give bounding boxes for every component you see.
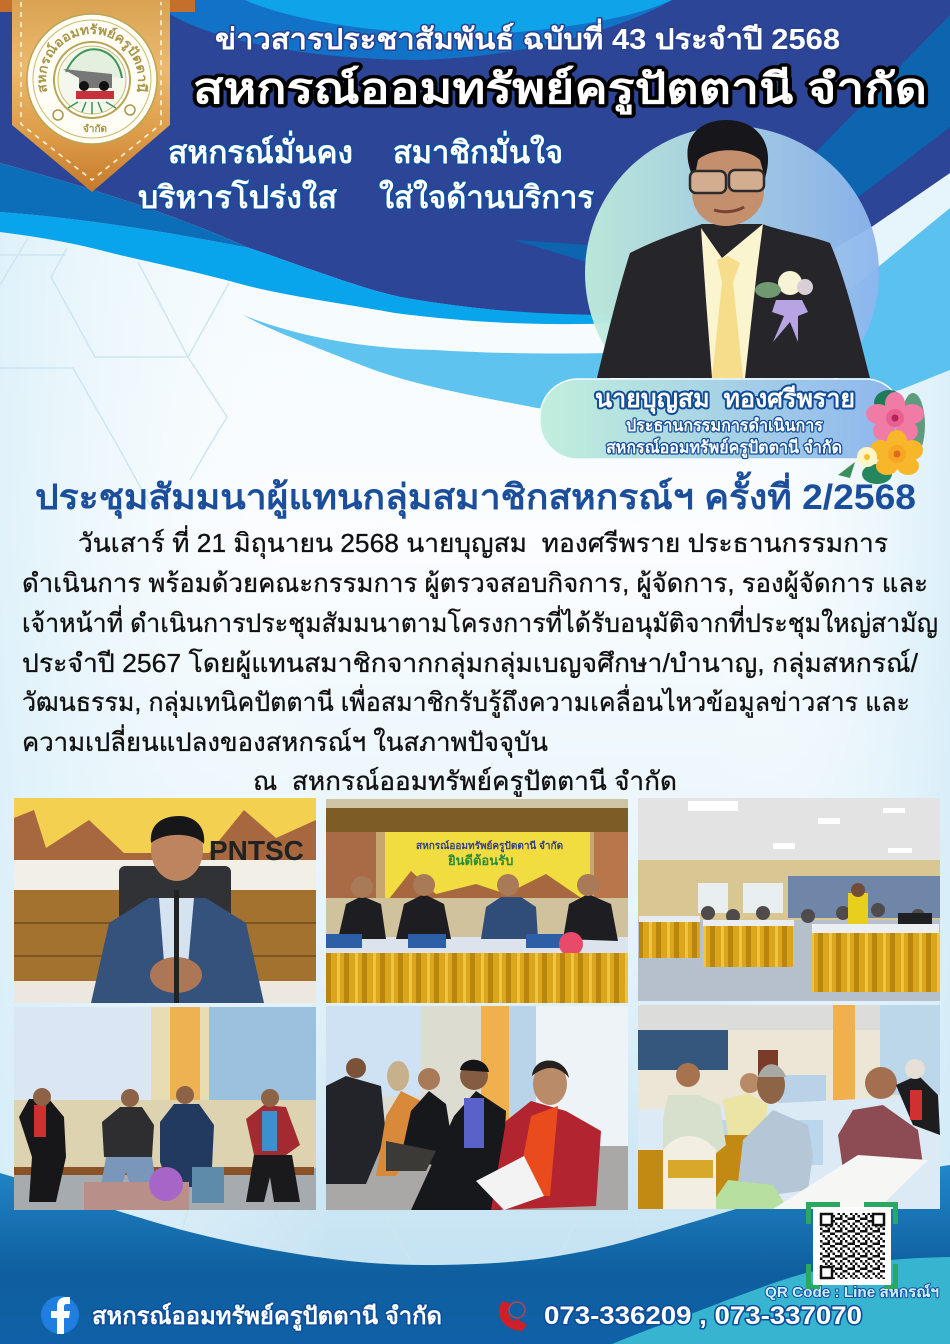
name plate — [540, 379, 903, 459]
photo: four men on sofas — [14, 1007, 316, 1210]
photo: chairman at microphone — [14, 798, 316, 1003]
photo: members at tables — [638, 1005, 940, 1209]
photo: panel at head table — [326, 799, 628, 1003]
name plate: ประธานกรรมการดำเนินการ — [626, 416, 824, 435]
icon: facebook — [41, 1296, 79, 1334]
slogans: ใส่ใจด้านบริการ — [379, 179, 594, 215]
footer waves — [0, 1165, 950, 1344]
portrait of chairman — [585, 120, 879, 420]
photo: seated guests in a row — [326, 1006, 628, 1210]
slogans: สหกรณ์มั่นคง — [168, 130, 353, 170]
slogans: บริหารโปร่งใส — [138, 179, 337, 215]
article body — [22, 525, 938, 797]
QR code with caption — [765, 1204, 939, 1301]
photo: chairman at microphone: PNTSC — [209, 835, 304, 866]
photo: panel at head table: ยินดีต้อนรับ — [448, 853, 513, 868]
logo ribbon — [0, 0, 195, 192]
logo seal: จำกัด — [83, 123, 107, 135]
photo: panel at head table: สหกรณ์ออมทรัพย์ครูปัตตานี จำกัด — [416, 840, 563, 853]
QR code with caption: QR Code : Line สหกรณ์ฯ — [765, 1283, 939, 1301]
facebook page name: สหกรณ์ออมทรัพย์ครูปัตตานี จำกัด — [92, 1302, 442, 1331]
organisation title: สหกรณ์ออมทรัพย์ครูปัตตานี จำกัด — [193, 65, 927, 115]
name plate: นายบุญสม ทองศรีพราย — [595, 385, 855, 415]
phone numbers: 073-336209 , 073-337070 — [544, 1302, 862, 1330]
article body: ความเปลี่ยนแปลงของสหกรณ์ฯ ในสภาพปัจจุบัน — [22, 724, 548, 758]
article body: เจ้าหน้าที่ ดำเนินการประชุมสัมมนาตามโครงการที่ได้รับอนุมัติจากที่ประชุมใหญ่สามัญ — [22, 605, 938, 639]
icon: telephone — [499, 1301, 527, 1331]
logo seal: สหกรณ์ออมทรัพย์ครูปัตตานี — [38, 23, 148, 93]
meeting heading: ประชุมสัมมนาผู้แทนกลุ่มสมาชิกสหกรณ์ฯ ครั้งที่ 2/2568 — [35, 471, 916, 519]
photo: meeting hall — [638, 798, 940, 1001]
blue header waves — [0, 0, 950, 415]
logo seal — [26, 13, 158, 145]
header line: ข่าวสารประชาสัมพันธ์ ฉบับที่ 43 ประจำปี 2568 — [215, 18, 840, 56]
icon: flowers — [838, 390, 925, 484]
article body: ประจำปี 2567 โดยผู้แทนสมาชิกจากกลุ่มกลุ่มเบญจศึกษา/บำนาญ, กลุ่มสหกรณ์/ — [22, 648, 919, 679]
article body: ณ สหกรณ์ออมทรัพย์ครูปัตตานี จำกัด — [253, 766, 677, 797]
article body: วัฒนธรรม, กลุ่มเทนิคปัตตานี เพื่อสมาชิกรับรู้ถึงความเคลื่อนไหวข้อมูลข่าวสาร และ — [22, 684, 910, 718]
article body: วันเสาร์ ที่ 21 มิถุนายน 2568 นายบุญสม ทองศรีพราย ประธานกรรมการ — [78, 525, 888, 559]
slogans: สมาชิกมั่นใจ — [393, 130, 563, 170]
article body: ดำเนินการ พร้อมด้วยคณะกรรมการ ผู้ตรวจสอบกิจการ, ผู้จัดการ, รองผู้จัดการ และ — [22, 568, 928, 599]
slogans — [138, 130, 594, 215]
name plate: สหกรณ์ออมทรัพย์ครูปัตตานี จำกัด — [606, 437, 842, 459]
